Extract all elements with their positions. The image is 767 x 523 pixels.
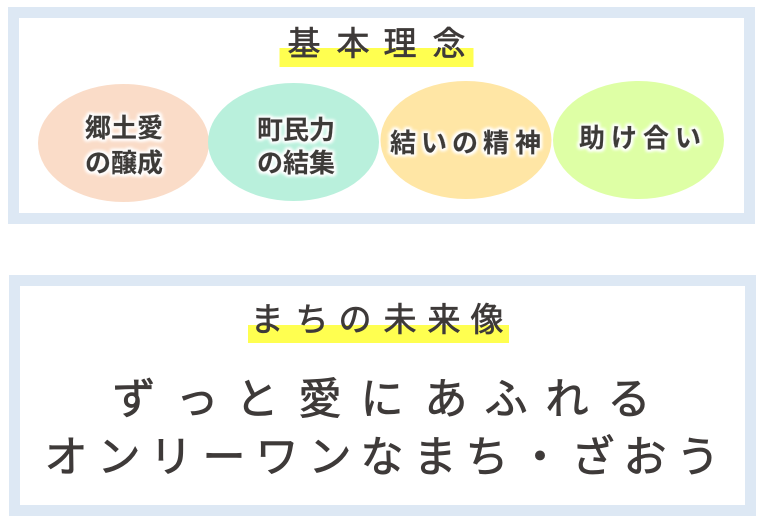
circle shape: [38, 84, 209, 202]
heading highlight: [280, 48, 474, 67]
circle shape: [553, 81, 724, 199]
circle label: の結集: [257, 148, 335, 178]
circle label: の醸成: [85, 148, 163, 178]
panel: basic philosophy: [14, 12, 750, 218]
circle label: 助け合い: [579, 123, 701, 153]
circle label: 郷土愛: [85, 113, 163, 143]
circle label: 結いの精神: [390, 128, 541, 158]
circle label: 町民力: [257, 115, 335, 145]
circle: 郷土愛の醸成: [38, 84, 209, 202]
heading: まちの未来像: [248, 301, 509, 343]
circle label: [85, 113, 163, 178]
heading text: まちの未来像: [250, 301, 504, 338]
vision line 1: ずっと愛にあふれる: [112, 376, 650, 424]
heading: 基本理念: [280, 25, 474, 67]
circle label: [257, 115, 335, 178]
vision statement: [44, 376, 720, 482]
circle shape: [208, 83, 379, 201]
circle: 町民力の結集: [208, 83, 379, 201]
panel frame: [14, 280, 750, 510]
heading highlight: [248, 325, 509, 343]
heading text: 基本理念: [288, 25, 466, 62]
circle: 助け合い: [553, 81, 724, 199]
circle: 結いの精神: [380, 81, 552, 199]
vision line 2: オンリーワンなまち・ざおう: [44, 434, 720, 482]
panel: future vision: [14, 280, 750, 510]
panel frame: [14, 12, 750, 218]
circle shape: [380, 81, 552, 199]
